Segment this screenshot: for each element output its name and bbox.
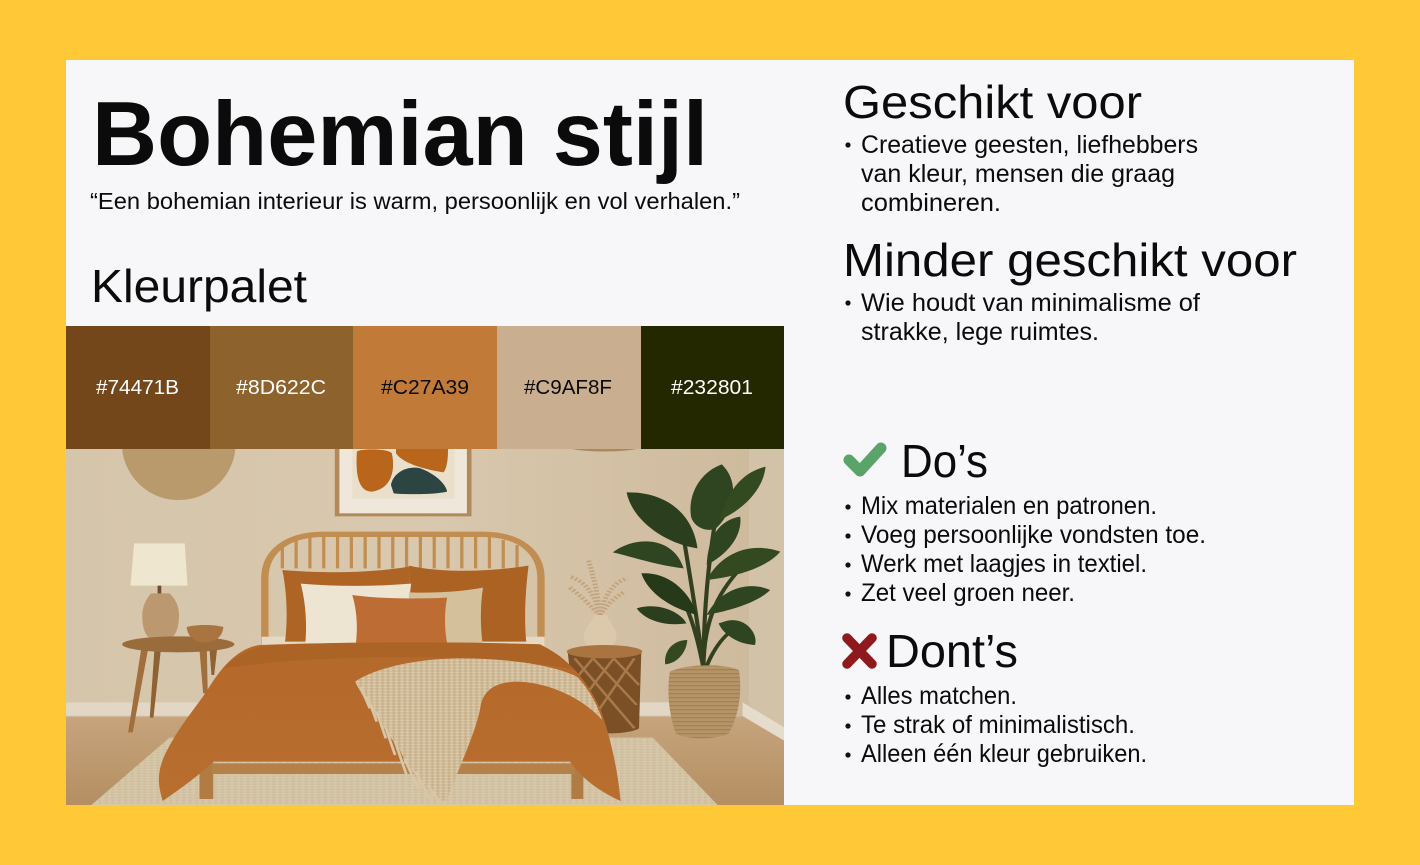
colour palette: #C9AF8F xyxy=(524,377,612,399)
rattan side table xyxy=(567,645,642,733)
rug xyxy=(89,738,720,807)
list: minder geschikt voor: strakke, lege ruimtes. xyxy=(861,318,1099,346)
heading: Kleurpalet: Kleurpalet xyxy=(91,260,307,312)
potted plant xyxy=(613,464,780,738)
list: geschikt voor: Creatieve geesten, liefhebbers xyxy=(861,131,1198,159)
list: minder geschikt voor: Wie houdt van minimalisme of xyxy=(861,289,1200,317)
colour palette: #C27A39 xyxy=(381,377,469,399)
heading: Dont's: Dont’s xyxy=(886,625,1018,677)
woven wall disc xyxy=(122,448,235,500)
list: do's: Zet veel groen neer. xyxy=(861,579,1075,607)
photo: bohemian bedroom xyxy=(66,449,784,805)
duvet and bed frame xyxy=(159,642,621,801)
list: geschikt voor xyxy=(845,131,1198,217)
list: dont's: Alles matchen. xyxy=(861,682,1017,710)
list: dont's xyxy=(845,682,1147,768)
list: dont's: Te strak of minimalistisch. xyxy=(861,711,1135,739)
list: do's: Voeg persoonlijke vondsten toe. xyxy=(861,521,1206,549)
round side table with bowl xyxy=(122,625,234,732)
icon: green check xyxy=(849,448,881,471)
list: do's: Mix materialen en patronen. xyxy=(861,492,1157,520)
list: geschikt voor: combineren. xyxy=(861,189,1001,217)
icon: red cross xyxy=(847,638,872,664)
heading: Do's: Do’s xyxy=(901,435,988,487)
list: dont's: Alleen één kleur gebruiken. xyxy=(861,740,1147,768)
heading: Minder geschikt voor: Minder geschikt voor xyxy=(843,234,1297,286)
framed art xyxy=(335,447,471,516)
list: geschikt voor: van kleur, mensen die graag xyxy=(861,160,1175,188)
rattan headboard xyxy=(265,534,541,645)
list: do's xyxy=(845,492,1206,607)
pillows xyxy=(262,566,545,653)
colour palette xyxy=(66,326,784,449)
heading: Geschikt voor: Geschikt voor xyxy=(843,76,1142,128)
quote: “Een bohemian interieur is warm, persoonlijk en vol verhalen.” xyxy=(90,188,740,214)
colour palette: #74471B xyxy=(96,377,179,399)
lamp xyxy=(130,543,188,641)
colour palette: #8D622C xyxy=(236,377,326,399)
title: Bohemian stijl xyxy=(92,84,708,185)
list: do's: Werk met laagjes in textiel. xyxy=(861,550,1147,578)
dried flowers in vase xyxy=(568,560,628,650)
content panel xyxy=(66,60,1354,805)
colour palette: #232801 xyxy=(671,377,753,399)
list: minder geschikt voor xyxy=(845,289,1200,346)
knit throw blanket with fringe xyxy=(355,658,602,803)
